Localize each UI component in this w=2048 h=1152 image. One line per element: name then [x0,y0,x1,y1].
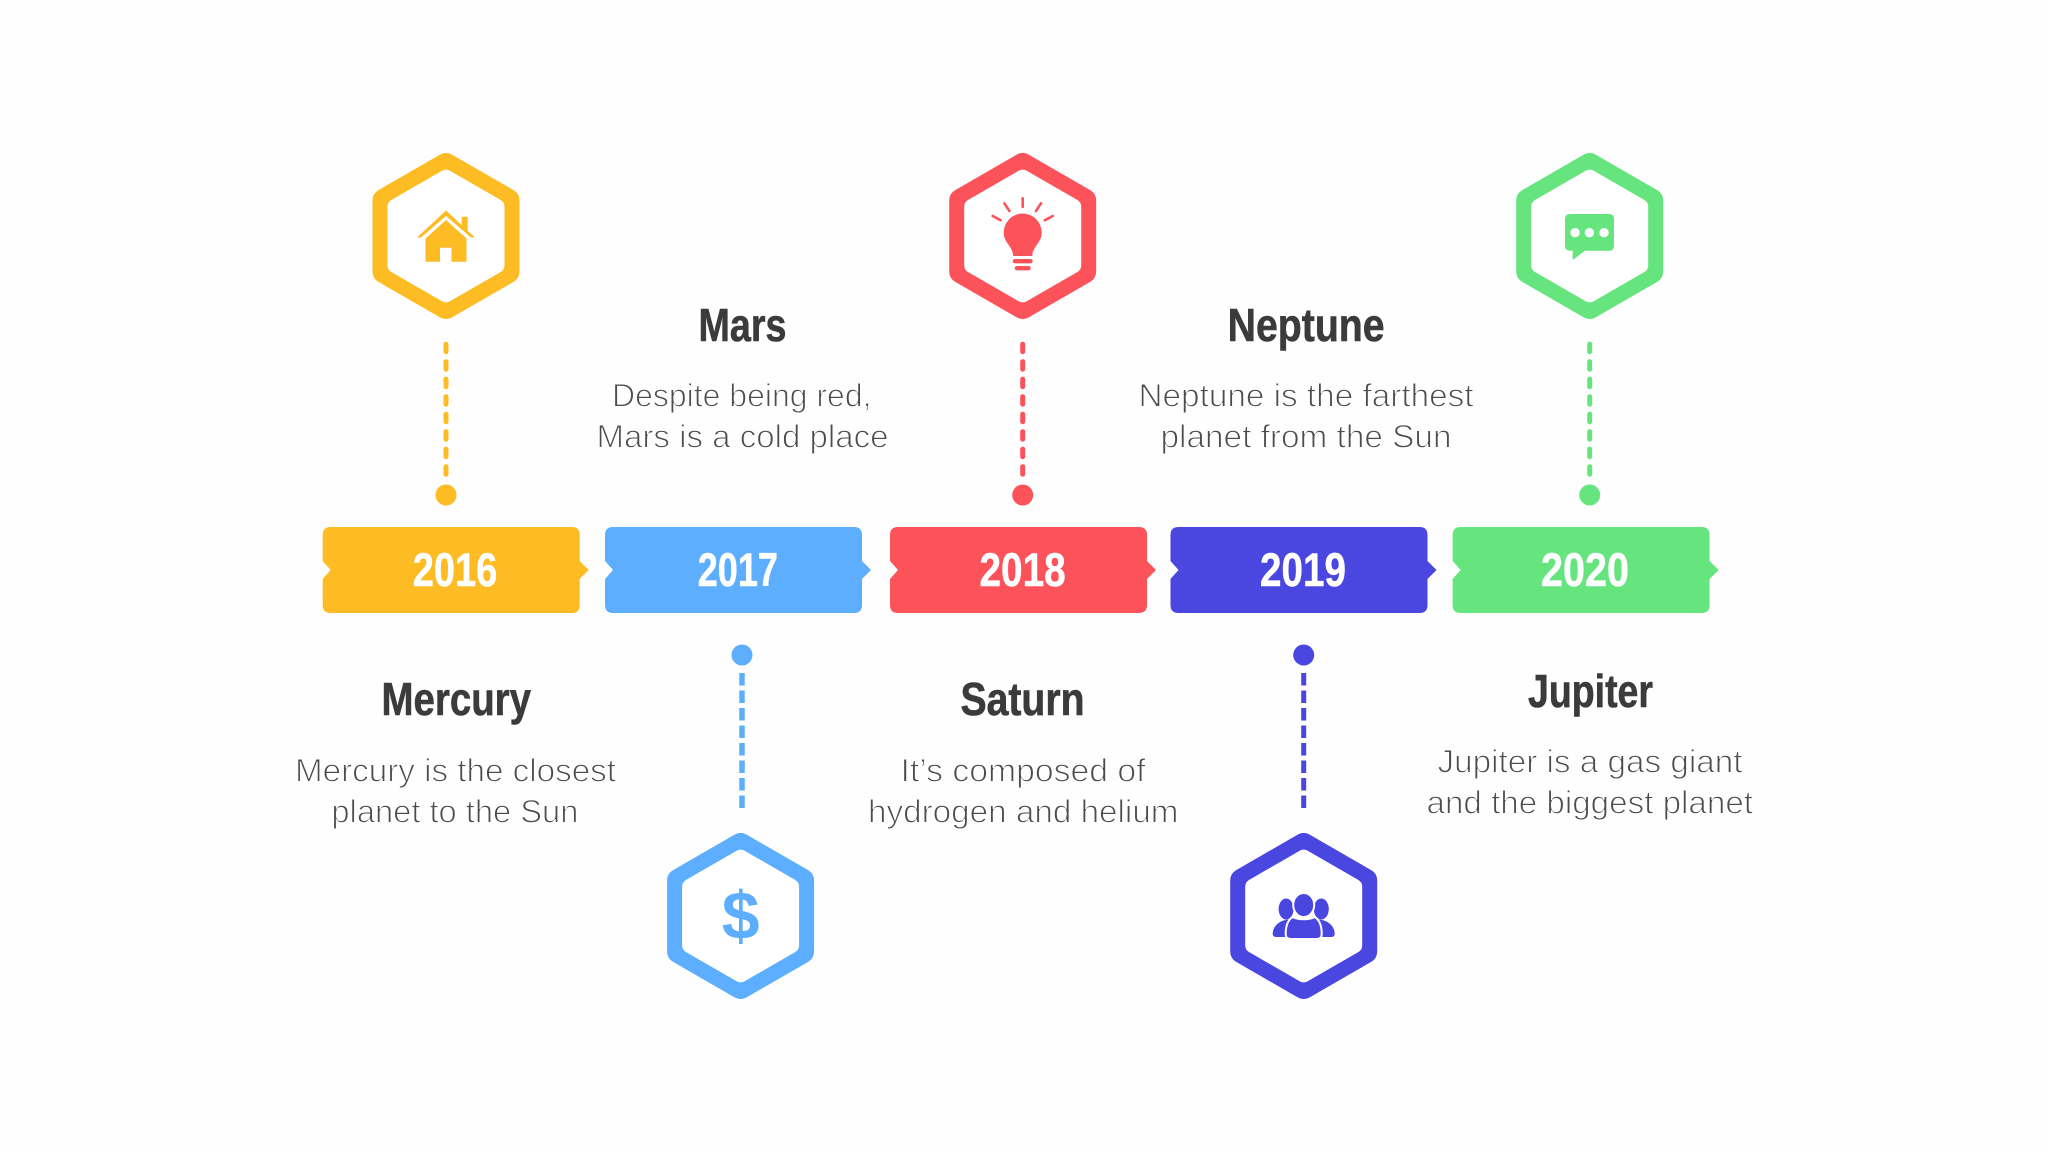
milestone 2020: Jupiter [1426,165,1753,820]
milestone 2018: Saturn [868,165,1178,830]
milestone 2017: Mars [596,299,888,987]
heading: Mercury: Mercury [382,673,531,725]
description: Mars: Mars is a cold place [596,418,888,454]
milestone 2016: Mercury [295,165,616,830]
description: Saturn: It’s composed of [900,752,1146,788]
description: Saturn: hydrogen and helium [868,794,1178,830]
year tab 2017 [605,527,871,613]
dashed connector [1301,673,1306,809]
connector dot [1293,644,1314,666]
hexagon icon: speech bubble [1528,165,1651,307]
heading: Saturn: Saturn [960,673,1084,725]
year tab 2020: 2020 [1541,543,1629,596]
year tab 2019: 2019 [1260,543,1346,596]
description: Jupiter: and the biggest planet [1426,784,1753,820]
description: Mars [596,378,888,454]
year tab 2020 [1453,527,1719,613]
description: Saturn [868,752,1178,830]
description: Neptune: planet from the Sun [1160,418,1452,454]
description: Mercury: planet to the Sun [331,794,578,830]
year tab 2017: 2017 [698,543,778,596]
year tab 2016: 2016 [413,543,497,596]
heading: Neptune: Neptune [1228,299,1385,351]
heading: Mars: Mars [698,299,786,351]
hexagon icon: light bulb [961,165,1084,307]
dashed connector [1587,344,1592,477]
description: Jupiter: Jupiter is a gas giant [1438,744,1743,780]
dashed connector [444,344,448,477]
description: Mars: Despite being red, [612,378,872,414]
connector dot [436,484,456,506]
heading: Jupiter: Jupiter [1528,665,1653,717]
dashed connector [1020,344,1025,477]
hexagon icon: people [1242,845,1365,987]
description: Mercury: Mercury is the closest [295,752,616,788]
description: Jupiter [1426,744,1753,820]
connector dot [1579,484,1600,506]
description: Neptune [1138,378,1474,454]
hexagon icon: dollar [679,845,802,987]
connector dot [1012,484,1033,506]
connector dot [732,644,752,666]
year tab 2018: 2018 [980,543,1066,596]
hexagon icon: dollar: $ [722,878,760,954]
description: Mercury [295,752,616,830]
description: Neptune: Neptune is the farthest [1138,378,1474,414]
year tab 2018 [890,527,1156,613]
dashed connector [739,673,745,809]
year tab 2016 [323,527,589,613]
milestone 2019: Neptune [1138,299,1474,987]
hexagon icon: house [384,165,508,307]
year tab 2019 [1170,527,1436,613]
